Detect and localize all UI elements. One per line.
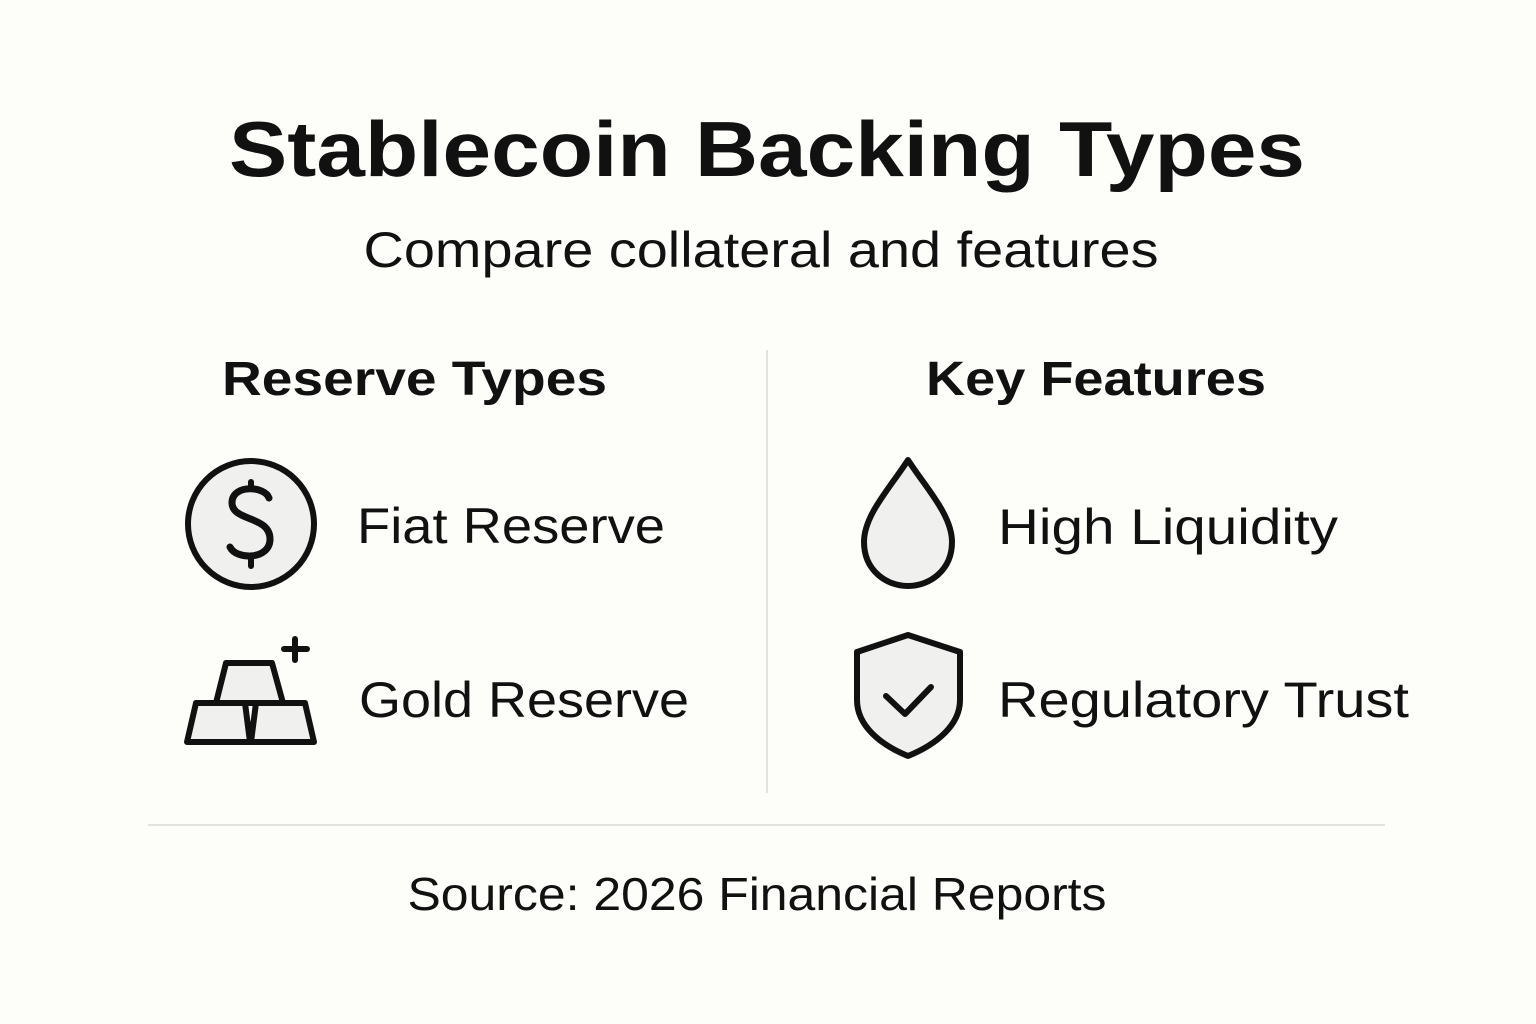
icon: water drop: [864, 460, 952, 586]
title: Stablecoin Backing Types: [229, 105, 1305, 193]
panel: key features: [857, 353, 1409, 756]
icon: shield check: [857, 635, 960, 756]
heading: reserve types: Reserve Types: [222, 353, 607, 406]
heading: key features: Key Features: [926, 353, 1266, 406]
source footer: Source: 2026 Financial Reports: [408, 868, 1106, 920]
text: gold reserve: Gold Reserve: [359, 672, 689, 728]
icon: dollar coin: [188, 461, 314, 587]
text: fiat reserve: Fiat Reserve: [357, 498, 665, 554]
text: high liquidity: High Liquidity: [998, 499, 1338, 555]
icon: gold bars: [187, 639, 314, 742]
panel: reserve types: [187, 353, 689, 742]
subtitle: Compare collateral and features: [364, 222, 1158, 278]
text: regulatory trust: Regulatory Trust: [998, 672, 1409, 728]
